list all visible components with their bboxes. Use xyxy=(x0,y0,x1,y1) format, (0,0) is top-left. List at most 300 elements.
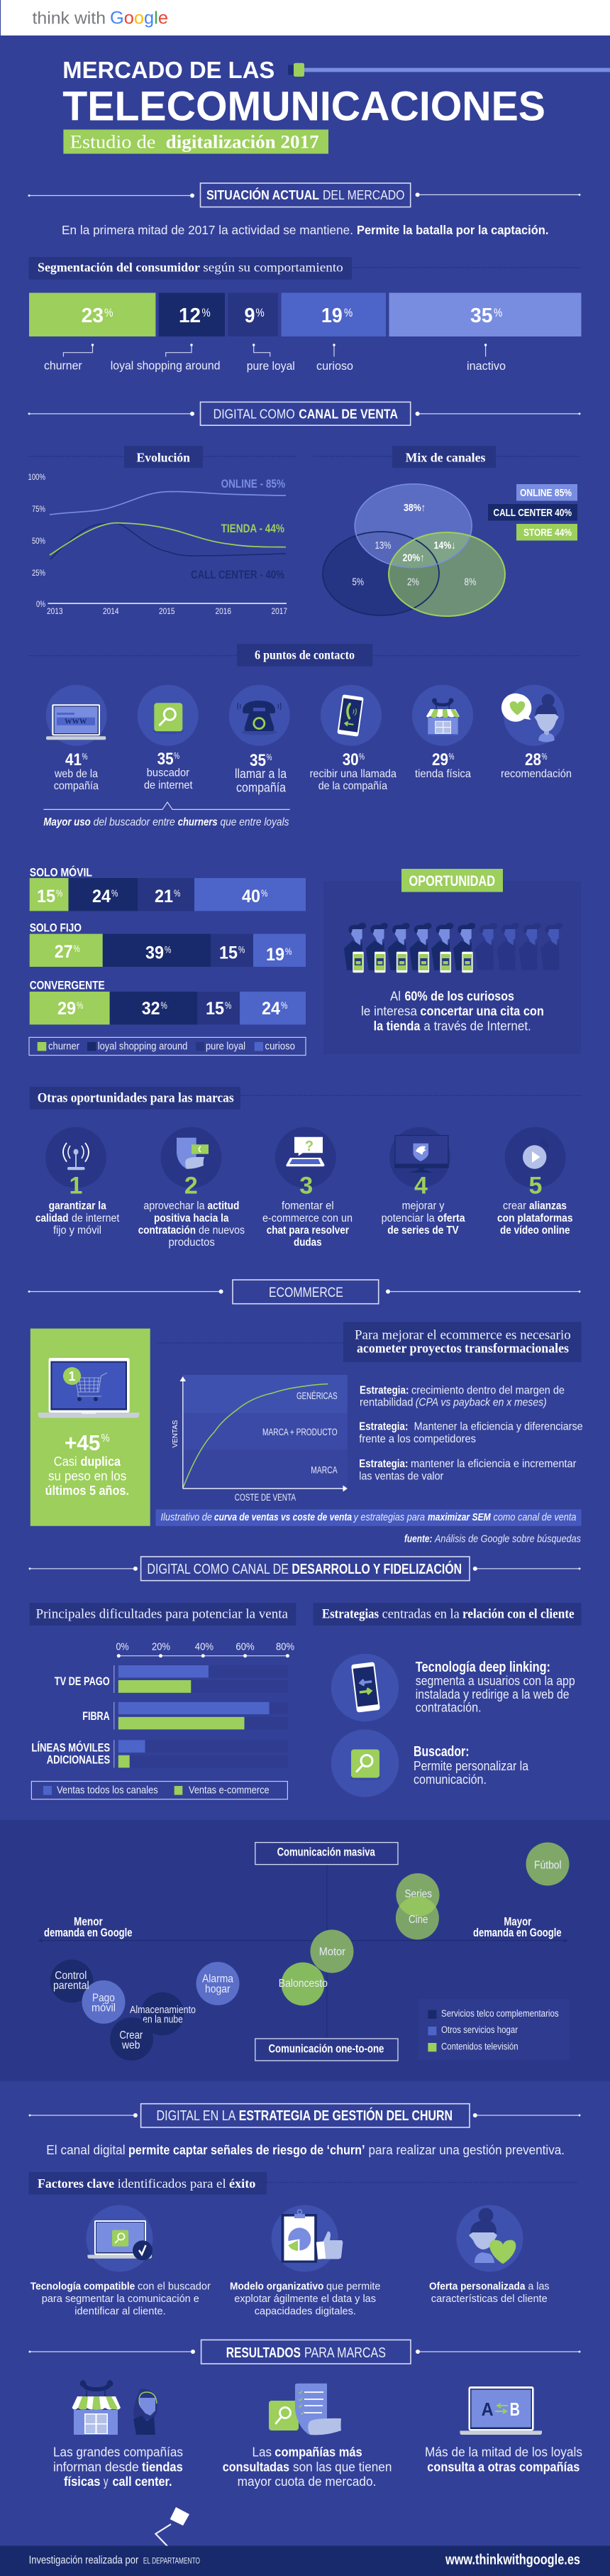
factor: tecnología compatible xyxy=(30,2205,211,2317)
segment churner 23% xyxy=(29,292,155,336)
factor: oferta personalizada: a las xyxy=(528,2280,549,2292)
contact point: recibir llamada: de la compañía xyxy=(318,780,387,792)
section header: situación actual: DEL MERCADO xyxy=(323,188,404,202)
contact point: recomendación: 28 xyxy=(525,750,541,769)
bar chart: dificultades xyxy=(31,1641,294,1767)
section header: desarrollo y fidelización xyxy=(28,1557,580,1581)
section header: resultados: PARA MARCAS xyxy=(304,2345,386,2361)
venn legend xyxy=(488,484,577,541)
text: le interesa xyxy=(361,1004,418,1018)
heading: otras oportunidades: Otras oportunidades para las marcas xyxy=(38,1092,234,1106)
line chart: evolución xyxy=(28,472,287,616)
opportunity 2: contratación xyxy=(138,1224,196,1237)
stacked bar: solo fijo: % xyxy=(285,946,292,957)
section header: ecommerce xyxy=(28,1280,580,1304)
chart: curva de ventas vs coste xyxy=(171,1375,348,1503)
stacked bar: solo fijo: SOLO FIJO xyxy=(30,921,82,934)
result: compañías más consultadas: compañías más xyxy=(274,2445,362,2459)
bubble: almacenamiento en la nube xyxy=(130,1992,196,2036)
venn legend: ONLINE 85% xyxy=(520,487,572,499)
bubble label: control parental: Control xyxy=(55,1970,87,1982)
result: tiendas físicas xyxy=(53,2381,183,2489)
legend: ventas: Ventas e-commerce xyxy=(189,1785,270,1797)
icon: bubble and person xyxy=(501,685,565,746)
heading: evolución xyxy=(29,446,296,468)
segment churner 23%: 23 xyxy=(82,305,104,327)
contact point: recibir llamada: 30 xyxy=(343,750,359,769)
stacked bar: convergente: 15 xyxy=(206,999,224,1019)
factor: modelo organizativo: que permite xyxy=(326,2280,380,2292)
contact point: recomendación: recomendación xyxy=(501,768,572,780)
strategy text block: rentabilidad xyxy=(360,1397,413,1409)
strategy: buscador: Buscador: xyxy=(414,1744,470,1760)
left axis label: Menor xyxy=(74,1915,103,1928)
opportunity 2: de nuevos xyxy=(199,1224,245,1237)
panel: +45% ecommerce: duplica xyxy=(81,1454,121,1469)
opportunity 3: dudas xyxy=(294,1237,322,1249)
contact point: llamar: 35 xyxy=(250,751,266,770)
bubble: control parental xyxy=(50,1959,94,2003)
heading: factores clave: identificados para el xyxy=(118,2176,226,2191)
caption: ilustrativo: maximizar SEM xyxy=(428,1512,491,1523)
callout: mayor uso del buscador xyxy=(43,802,290,828)
segment churner 23%: % xyxy=(104,306,113,319)
contact point: llamar: % xyxy=(267,752,272,762)
legend: ventas: Ventas todos los canales xyxy=(57,1785,158,1797)
group: fibra: FIBRA xyxy=(82,1709,110,1723)
icon: person with heart xyxy=(457,2205,523,2271)
section header: gestión del churn xyxy=(28,2104,580,2127)
heading: segmentación: según su comportamiento xyxy=(203,261,343,275)
contact point: buscador xyxy=(138,685,199,791)
legend: segmentos xyxy=(29,1037,306,1056)
stacked bar: convergente: % xyxy=(77,999,83,1011)
result: tiendas físicas: físicas xyxy=(64,2474,101,2489)
opportunity 5 xyxy=(497,1127,573,1237)
opportunity 2: actitud xyxy=(207,1200,239,1212)
left axis label xyxy=(44,1915,132,1939)
opportunity 1: calidad xyxy=(35,1212,68,1224)
chart: curva de ventas vs coste: MARCA + PRODUCTO xyxy=(262,1427,338,1437)
icon: telephone xyxy=(229,685,290,746)
icon row: people with phones xyxy=(344,923,562,972)
factor: tecnología compatible: Tecnología compatible xyxy=(30,2280,135,2292)
churn intro text: permite captar señales de riesgo de ‘churn’ xyxy=(128,2142,365,2157)
line chart: evolución: 50% xyxy=(32,536,45,546)
strategy text block: Estrategia: xyxy=(359,1421,408,1433)
group: líneas móviles adicionales: LÍNEAS MÓVILES xyxy=(31,1741,110,1755)
strategy text block: (CPA vs payback en x meses) xyxy=(416,1397,547,1409)
bubble: pago móvil xyxy=(82,1980,125,2024)
icon: laptop a/b xyxy=(460,2386,542,2435)
contact point: recibir llamada xyxy=(310,685,396,792)
panel: +45% ecommerce: su peso en los xyxy=(48,1468,126,1484)
opportunity 2: 2 xyxy=(184,1173,198,1200)
contact point: recomendación xyxy=(501,685,572,780)
panel: +45% ecommerce: Casi xyxy=(54,1454,77,1469)
icon: laptop www xyxy=(46,685,107,746)
segment labels: pure loyal xyxy=(247,360,295,373)
icon: tv with shield xyxy=(389,1127,450,1188)
icon: laptop a/b: B xyxy=(510,2399,520,2420)
stacked bar: solo móvil: SOLO MÓVIL xyxy=(30,865,92,879)
group: tv de pago: TV DE PAGO xyxy=(55,1675,110,1688)
opportunity 2: positiva hacia la xyxy=(154,1212,229,1224)
bubble: baloncesto: Baloncesto xyxy=(279,1978,328,1990)
opportunity 3: 3 xyxy=(299,1173,313,1200)
panel: +45% ecommerce xyxy=(30,1329,150,1526)
bar chart: dificultades: 60% xyxy=(235,1641,255,1653)
section header: gestión del churn: ESTRATEGIA DE GESTIÓN DEL CHURN xyxy=(239,2107,453,2124)
bubble: motor: Motor xyxy=(319,1946,346,1958)
stacked bar: solo fijo: 15 xyxy=(219,943,238,963)
result: compañías más consultadas: consultadas xyxy=(223,2459,289,2474)
contact point: buscador: % xyxy=(174,751,179,761)
stacked bar: solo fijo: 19 xyxy=(266,945,284,965)
bubble: cine xyxy=(396,1897,439,1939)
group: líneas móviles adicionales: ADICIONALES xyxy=(47,1753,110,1767)
stacked bar: solo fijo: 27 xyxy=(55,942,73,962)
stacked bar: solo fijo: % xyxy=(238,943,245,955)
subtitle badge: digitalización 2017 xyxy=(166,132,319,153)
heading: principales dificultades xyxy=(30,1603,296,1626)
contact point: recibir llamada: recibir una llamada xyxy=(310,768,396,780)
bubble: series xyxy=(396,1873,440,1917)
opportunity 5: de vídeo online xyxy=(500,1224,570,1237)
line chart: evolución: 25% xyxy=(32,568,45,578)
contact point: llamar: llamar a la xyxy=(235,767,287,781)
opportunity 2: productos xyxy=(169,1237,215,1249)
contact point: buscador: de internet xyxy=(144,779,193,791)
group: líneas móviles adicionales xyxy=(31,1740,289,1767)
stacked bar: solo móvil xyxy=(30,865,306,911)
stacked bar: solo fijo: 39 xyxy=(145,943,164,963)
title block: TELECOMUNICACIONES xyxy=(62,84,545,129)
segment curioso 19% xyxy=(282,292,386,336)
legend: segmentos: curioso xyxy=(265,1041,295,1053)
contact point: web xyxy=(46,685,107,792)
bar chart: dificultades: 20% xyxy=(152,1641,170,1653)
opportunity 5: con plataformas xyxy=(497,1212,573,1224)
legend: segmentos: loyal shopping around xyxy=(98,1041,187,1053)
segment pure loyal 9% xyxy=(228,292,278,336)
factor: tecnología compatible: con el buscador xyxy=(138,2280,211,2292)
opportunity 1: de internet xyxy=(72,1212,120,1224)
bubble: cine: Cine xyxy=(409,1914,428,1926)
heading: mix de canales xyxy=(314,446,580,468)
right axis label xyxy=(473,1915,562,1939)
heading: factores clave xyxy=(29,2172,578,2195)
callout: mayor uso del buscador: churners xyxy=(178,816,218,828)
bubble: crear web: Crear xyxy=(119,2029,143,2041)
caption: ilustrativo: Ilustrativo de xyxy=(160,1512,212,1523)
churn intro text: El canal digital xyxy=(46,2142,126,2157)
factor: tecnología compatible: para segmentar la comunicación e xyxy=(42,2293,199,2305)
strategy: buscador: Permite personalizar la xyxy=(414,1759,529,1773)
strategy text block: mantener la eficiencia e incrementar xyxy=(411,1458,577,1470)
heading: mix de canales: Mix de canales xyxy=(406,450,485,464)
opportunity 4 xyxy=(382,1127,465,1237)
opportunity 1 xyxy=(35,1127,120,1237)
heading: mejorar el ecommerce xyxy=(158,1322,581,1362)
stacked bar: convergente: 29 xyxy=(57,999,76,1019)
stacked bar: solo móvil: % xyxy=(261,887,267,899)
panel: +45% ecommerce: % xyxy=(101,1432,110,1445)
line chart: evolución: 2015 xyxy=(159,606,175,616)
subtitle badge xyxy=(63,129,328,154)
opportunity 2: aprovechar la xyxy=(143,1200,205,1212)
stacked bar: convergente: % xyxy=(160,999,167,1011)
badge: OPORTUNIDAD xyxy=(409,873,495,889)
factor: modelo organizativo xyxy=(230,2205,380,2317)
venn legend: STORE 44% xyxy=(523,527,572,539)
strategy text block: Mantener la eficiencia y diferenciarse xyxy=(414,1421,583,1433)
heading: factores clave: éxito xyxy=(229,2176,255,2191)
strategy: buscador: comunicación. xyxy=(414,1772,487,1787)
icon: clipboard with thumb xyxy=(272,2205,343,2271)
contact point: web: 41 xyxy=(65,750,82,769)
heading: segmentación xyxy=(29,257,581,280)
heading: principales dificultades: Principales dificultades para potenciar la venta xyxy=(35,1607,288,1621)
contact point: web: compañía xyxy=(54,780,99,792)
opportunity 3: e-commerce con un xyxy=(262,1212,353,1224)
opportunity 5: crear xyxy=(503,1200,526,1212)
icon: store xyxy=(412,685,473,746)
strategy text block: Estrategia: xyxy=(359,1458,408,1470)
section header: desarrollo y fidelización: DIGITAL COMO CANAL DE xyxy=(147,1562,289,1577)
segment labels xyxy=(44,344,506,373)
bubble: pago móvil: Pago xyxy=(92,1992,115,2004)
header bar with logo xyxy=(0,0,610,35)
opportunity 4: de series de TV xyxy=(387,1224,459,1237)
contact point: tienda física: % xyxy=(448,752,454,762)
chart: curva de ventas vs coste: VENTAS xyxy=(171,1420,179,1448)
heading: 6 puntos de contacto xyxy=(29,644,580,667)
icon: phone with arrows xyxy=(331,1654,399,1721)
strategy text block: Estrategia: xyxy=(360,1384,409,1396)
legend: servicios: Contenidos televisión xyxy=(441,2041,518,2052)
stacked bar: solo fijo xyxy=(30,921,306,967)
segment labels: loyal shopping around xyxy=(111,359,220,372)
strategy: deep linking: segmenta a usuarios con la app xyxy=(416,1674,575,1688)
section header: canal de venta xyxy=(28,402,580,425)
callout: mayor uso del buscador: del buscador entre xyxy=(94,816,175,828)
heading: otras oportunidades xyxy=(30,1087,582,1109)
contact point: tienda física: tienda física xyxy=(415,768,471,780)
legend: servicios: Servicios telco complementarios xyxy=(441,2008,559,2019)
churn intro text: para realizar una gestión preventiva. xyxy=(369,2142,565,2157)
result: loyals consultan: consulta a otras compañías xyxy=(427,2459,580,2474)
bubble: alarma hogar: Alarma xyxy=(202,1973,233,1985)
panel: +45% ecommerce: +45 xyxy=(65,1430,101,1455)
segment labels: churner xyxy=(44,359,82,372)
opportunity 1: garantizar la xyxy=(49,1200,106,1212)
contact point: recomendación: % xyxy=(542,752,548,762)
factor: tecnología compatible: identificar al cliente. xyxy=(74,2305,166,2317)
venn diagram: mix de canales: 13% xyxy=(375,539,392,552)
opportunity 4: 4 xyxy=(414,1173,428,1200)
icon: laptop with cart xyxy=(38,1358,139,1418)
heading: estrategias relación cliente xyxy=(314,1603,582,1626)
stacked bar: solo fijo: % xyxy=(165,943,171,955)
top axis label: Comunicación masiva xyxy=(277,1846,375,1858)
caption: ilustrativo: curva de ventas vs coste de venta xyxy=(214,1512,352,1523)
text xyxy=(361,990,544,1033)
stacked bar: solo móvil: 15 xyxy=(37,887,55,906)
intro text: Permite la batalla por la captación. xyxy=(357,223,548,237)
bubble label: control parental: parental xyxy=(53,1980,89,1992)
section header: ecommerce: ECOMMERCE xyxy=(269,1286,343,1300)
opportunity 1: fijo y móvil xyxy=(53,1224,101,1237)
icon: antenna xyxy=(45,1127,106,1188)
stacked bar: solo fijo: % xyxy=(74,943,80,954)
icon: chat tablet xyxy=(275,1127,336,1188)
venn legend: CALL CENTER 40% xyxy=(494,507,572,519)
opportunity 4: oferta xyxy=(438,1212,465,1224)
source note: fuente: xyxy=(404,1533,433,1545)
result: loyals consultan xyxy=(425,2386,582,2474)
heading: estrategias relación cliente: relación con el cliente xyxy=(462,1607,575,1621)
icon: search and document xyxy=(269,2384,341,2435)
heading: estrategias relación cliente: Estrategias xyxy=(322,1607,379,1621)
stacked bar: convergente: 32 xyxy=(142,999,160,1019)
opportunity 4: potenciar la xyxy=(382,1212,435,1224)
series: call center: CALL CENTER - 40% xyxy=(191,568,284,581)
heading: segmentación: Segmentación del consumidor xyxy=(38,261,200,275)
churn intro text xyxy=(46,2142,565,2157)
segment inactivo 35%: 35 xyxy=(470,305,492,327)
legend: segmentos: churner xyxy=(48,1041,79,1053)
stacked bar: solo móvil: 24 xyxy=(92,887,111,906)
section header: desarrollo y fidelización: DESARROLLO Y FIDELIZACIÓN xyxy=(292,1560,462,1577)
opportunity 5: 5 xyxy=(529,1173,542,1200)
section header: gestión del churn: DIGITAL EN LA xyxy=(156,2108,236,2124)
venn diagram: mix de canales: 5% xyxy=(352,576,364,588)
series: online xyxy=(50,477,286,515)
panel: matriz de demanda xyxy=(0,1820,610,2081)
group: fibra xyxy=(82,1702,289,1729)
contact point: llamar xyxy=(229,685,290,795)
stacked bar: solo móvil: 40 xyxy=(242,887,260,906)
venn diagram: mix de canales: 38%↑ xyxy=(404,502,426,514)
icon: chat tablet: ? xyxy=(305,1139,314,1154)
header bar with logo: Google xyxy=(110,9,168,28)
title block xyxy=(62,57,545,154)
right axis label: demanda en Google xyxy=(473,1926,562,1939)
intro text: En la primera mitad de 2017 la actividad se mantiene. xyxy=(62,223,353,237)
segment labels: inactivo xyxy=(467,360,506,373)
caption: ilustrativo xyxy=(155,1509,581,1526)
series: online: ONLINE - 85% xyxy=(221,477,285,490)
bubble: almacenamiento en la nube: en la nube xyxy=(143,2015,183,2026)
icon: play button xyxy=(505,1127,566,1188)
bar chart: dificultades: 0% xyxy=(116,1641,129,1653)
icon: cable plug xyxy=(288,63,610,77)
heading: evolución: Evolución xyxy=(136,450,190,464)
bubble: fútbol xyxy=(526,1843,569,1885)
line chart: evolución: 2016 xyxy=(216,606,231,616)
contact point: llamar: compañía xyxy=(236,781,287,795)
stacked bar: convergente: 24 xyxy=(262,999,280,1019)
top axis label xyxy=(255,1843,398,1865)
strategy text block: las ventas de valor xyxy=(359,1470,444,1482)
chart: curva de ventas vs coste: COSTE DE VENTA xyxy=(235,1492,296,1503)
bubble label: control parental xyxy=(53,1970,89,1992)
factor: modelo organizativo: capacidades digitales. xyxy=(255,2305,356,2317)
bubble: alarma hogar: hogar xyxy=(205,1983,231,1995)
icon: laptop www: WWW xyxy=(65,718,87,726)
opportunity 3: chat para resolver xyxy=(267,1224,349,1237)
text: la tienda xyxy=(374,1019,421,1033)
contact point: web: % xyxy=(82,752,88,762)
contact point: web: web de la xyxy=(54,768,98,780)
bottom axis label xyxy=(255,2039,398,2061)
bubble: crear web: web xyxy=(121,2039,140,2051)
segment labels: curioso xyxy=(316,360,353,373)
icon: laptop search check xyxy=(87,2205,153,2271)
venn diagram: mix de canales: 20%↑ xyxy=(403,552,424,564)
footer: EL DEPARTAMENTO xyxy=(143,2556,200,2566)
stacked bar: convergente: % xyxy=(281,999,287,1011)
section header: situación actual: SITUACIÓN ACTUAL xyxy=(206,187,319,202)
stacked bar: convergente xyxy=(30,979,306,1024)
section header: situación actual xyxy=(28,183,580,207)
segment loyal shopping around 12%: 12 xyxy=(179,305,201,327)
segment loyal shopping around 12% xyxy=(159,292,225,336)
stacked bar: convergente: CONVERGENTE xyxy=(30,979,105,992)
opportunity 2 xyxy=(138,1127,245,1249)
opportunity 3 xyxy=(262,1127,353,1249)
contact point: buscador: 35 xyxy=(157,750,174,769)
venn diagram: mix de canales: 14%↓ xyxy=(434,539,455,552)
legend: servicios: Otros servicios hogar xyxy=(441,2024,518,2035)
result: tiendas físicas: Las grandes compañías xyxy=(53,2445,183,2459)
text: a través de Internet. xyxy=(423,1019,531,1033)
panel: oportunidad xyxy=(323,869,581,1054)
opportunity 3: fomentar el xyxy=(282,1200,334,1212)
result: compañías más consultadas: mayor cuota de mercado. xyxy=(238,2474,376,2489)
contact point: buscador: buscador xyxy=(147,767,190,779)
caption: ilustrativo: y estrategias para xyxy=(353,1512,425,1523)
legend: segmentos: pure loyal xyxy=(206,1041,245,1053)
factor: oferta personalizada: características del cliente xyxy=(431,2293,548,2305)
segment inactivo 35%: % xyxy=(494,306,502,319)
segment pure loyal 9%: % xyxy=(255,306,265,319)
segment pure loyal 9%: 9 xyxy=(244,305,255,327)
bar chart: dificultades: 80% xyxy=(276,1641,294,1653)
series: call center xyxy=(50,523,286,581)
line chart: evolución: 100% xyxy=(28,472,45,482)
panel: +45% ecommerce: últimos 5 años. xyxy=(45,1483,129,1498)
icon: laptop a/b: A xyxy=(482,2399,494,2420)
footer xyxy=(0,2545,610,2576)
strategy text block xyxy=(359,1384,583,1482)
icon: search xyxy=(331,1729,399,1797)
strategy: deep linking: Tecnología deep linking: xyxy=(416,1660,550,1675)
section header: canal de venta: DIGITAL COMO xyxy=(214,407,295,421)
opportunity 5: alianzas xyxy=(529,1200,567,1212)
section header: canal de venta: CANAL DE VENTA xyxy=(299,407,398,421)
heading: mejorar el ecommerce: Para mejorar el ecommerce es necesario xyxy=(355,1329,571,1343)
opportunity 1: 1 xyxy=(70,1173,82,1200)
result: tiendas físicas: y xyxy=(104,2474,109,2489)
text: 60% de los curiosos xyxy=(404,990,514,1004)
bubble: motor xyxy=(311,1929,353,1973)
heading: estrategias relación cliente: centradas en la xyxy=(382,1607,460,1621)
right axis label: Mayor xyxy=(504,1915,532,1928)
bubble: series: Series xyxy=(404,1888,432,1900)
stacked bar: solo móvil: 21 xyxy=(155,887,173,906)
